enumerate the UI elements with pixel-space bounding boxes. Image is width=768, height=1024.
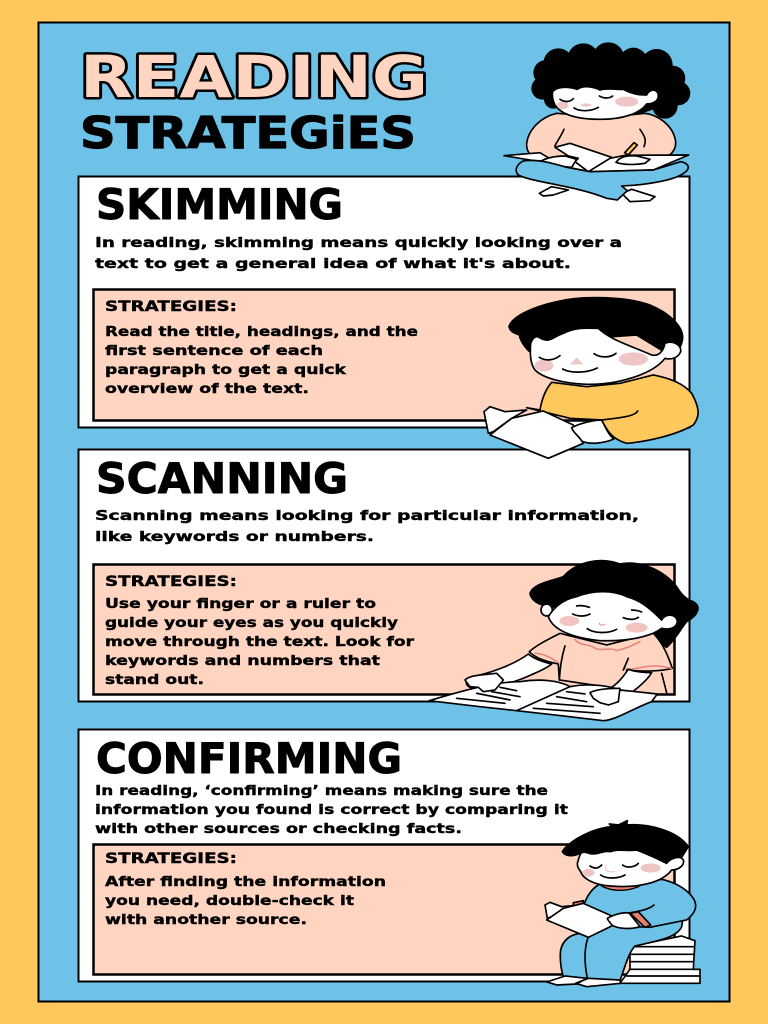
scanning definition	[95, 508, 639, 545]
confirming definition	[95, 783, 569, 837]
scanning strategies box	[94, 564, 674, 694]
skimming definition: text to get a general idea of what it's about.	[95, 256, 571, 272]
icon: child in yellow sweater with book	[484, 298, 698, 458]
icon: child in blue sweater on stack of books	[545, 821, 700, 987]
skimming strategies box: Read the title, headings, and the	[105, 324, 418, 340]
confirming strategies box: After finding the information	[105, 874, 386, 890]
skimming strategies box	[94, 290, 674, 420]
title word: reading: READING	[80, 43, 428, 111]
heading: skimming: SKIMMING	[96, 180, 343, 229]
skimming strategies box: STRATEGIES:	[105, 299, 237, 315]
confirming strategies box: you need, double-check it	[105, 893, 355, 909]
icon: child in peach blouse reading open book	[429, 561, 698, 721]
scanning strategies box: stand out.	[105, 672, 204, 688]
heading: scanning: SCANNING	[96, 454, 348, 503]
scanning strategies box: keywords and numbers that	[105, 653, 381, 669]
panel: skimming	[78, 176, 690, 428]
confirming definition: with other sources or checking facts.	[95, 821, 462, 837]
scanning strategies box: Use your finger or a ruler to	[105, 596, 376, 612]
scanning strategies box: move through the text. Look for	[105, 634, 414, 650]
heading: confirming: CONFIRMING	[96, 734, 402, 783]
stack of books	[620, 936, 700, 983]
scanning strategies box: STRATEGIES:	[105, 574, 237, 590]
scanning strategies box: guide your eyes as you quickly	[105, 615, 398, 631]
scanning definition: Scanning means looking for particular information,	[95, 508, 639, 524]
skimming strategies box: first sentence of each	[105, 343, 323, 359]
title word: strategies: STRATEGiES	[80, 108, 416, 159]
scanning definition: like keywords or numbers.	[95, 529, 374, 545]
confirming definition: In reading, ‘confirming’ means making sure the	[95, 783, 548, 799]
panel: scanning	[78, 450, 690, 702]
skimming strategies box: overview of the text.	[105, 381, 309, 397]
panel: confirming	[78, 730, 690, 982]
icon: child with curly hair writing	[504, 42, 690, 202]
confirming strategies box: STRATEGIES:	[105, 851, 237, 867]
confirming strategies box	[94, 844, 674, 974]
confirming definition: information you found is correct by comparing it	[95, 802, 569, 818]
skimming definition	[95, 235, 622, 272]
title	[80, 43, 428, 159]
skimming strategies box: paragraph to get a quick	[105, 362, 347, 378]
confirming strategies box: with another source.	[105, 912, 307, 928]
skimming definition: In reading, skimming means quickly looking over a	[95, 235, 622, 251]
